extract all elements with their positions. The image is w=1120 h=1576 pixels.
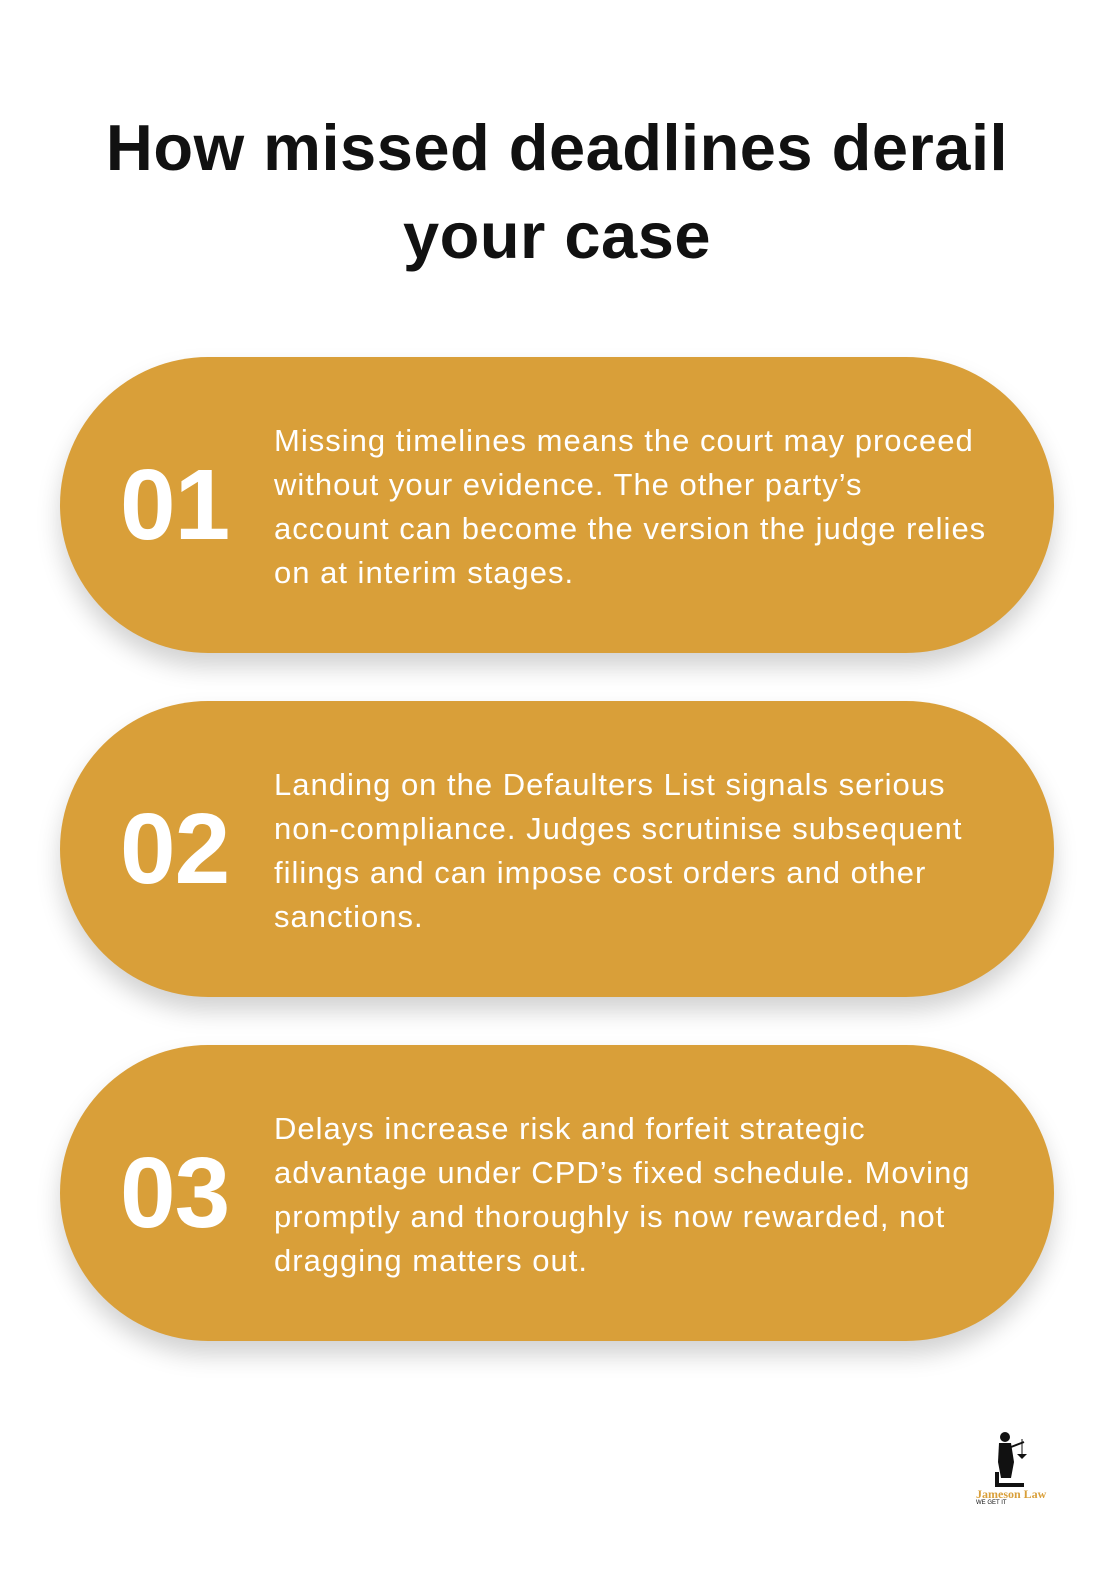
text block 03: advantage under CPD’s fixed schedule. Moving — [274, 1155, 971, 1190]
text block 03: dragging matters out. — [274, 1243, 588, 1278]
title — [106, 111, 1008, 272]
title: your case — [403, 199, 711, 272]
text block 03: Delays increase risk and forfeit strategic — [274, 1111, 866, 1146]
panel: step 01 — [60, 357, 1054, 653]
panel: step 02 — [60, 701, 1054, 997]
text block 01: Missing timelines means the court may proceed — [274, 423, 974, 458]
text block 02: sanctions. — [274, 899, 424, 934]
number 02: 02 — [120, 793, 229, 905]
text block 02: Landing on the Defaulters List signals serious — [274, 767, 946, 802]
text block 01: without your evidence. The other party’s — [274, 467, 863, 502]
text block 01: on at interim stages. — [274, 555, 574, 590]
text block 03: promptly and thoroughly is now rewarded, not — [274, 1199, 945, 1234]
logo text: Jameson Law — [976, 1487, 1046, 1501]
tagline: WE GET IT — [976, 1500, 1007, 1506]
logo — [976, 1432, 1046, 1506]
text block 02: non-compliance. Judges scrutinise subsequent — [274, 811, 962, 846]
number 01: 01 — [120, 449, 229, 561]
panel: step 03 — [60, 1045, 1054, 1341]
title: How missed deadlines derail — [106, 111, 1008, 184]
icon: justice figure — [995, 1432, 1027, 1487]
text block 02 — [274, 767, 962, 934]
text block 03 — [274, 1111, 971, 1278]
text block 01: account can become the version the judge relies — [274, 511, 986, 546]
number 03: 03 — [120, 1137, 229, 1249]
text block 01 — [274, 423, 986, 590]
text block 02: filings and can impose cost orders and other — [274, 855, 926, 890]
